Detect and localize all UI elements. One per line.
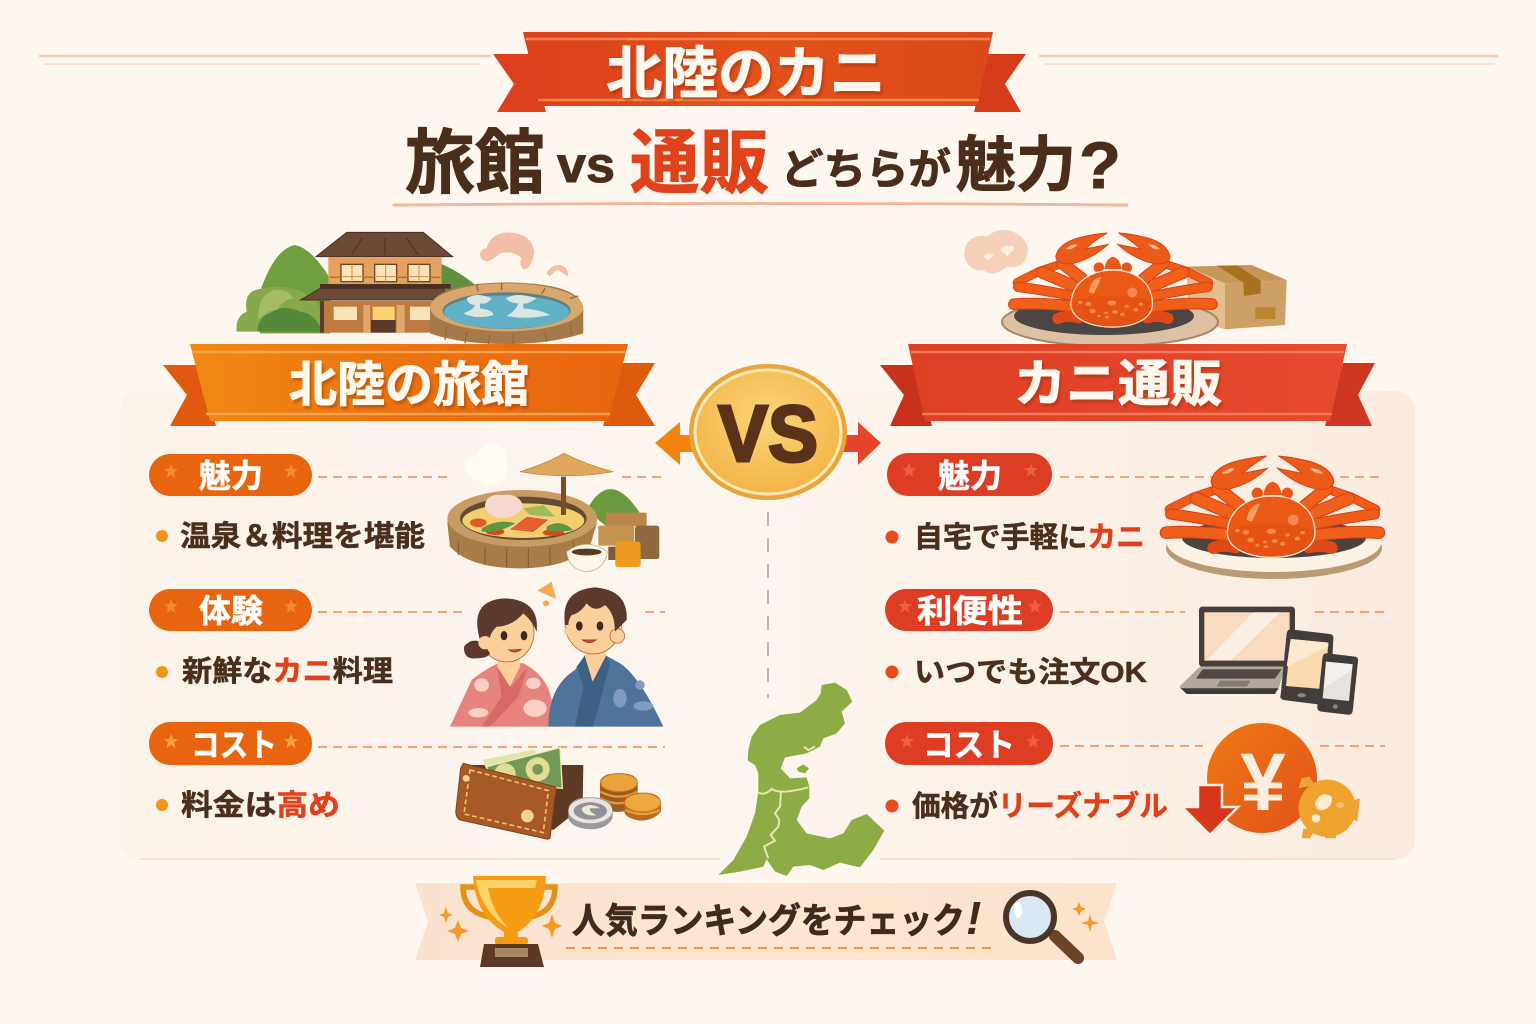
illustration: crab on plate <box>1166 456 1382 579</box>
pill: 体験 <box>149 589 312 631</box>
icon: crab <box>1014 233 1212 327</box>
coin <box>689 364 847 500</box>
icon: plate <box>1002 298 1218 346</box>
plate <box>1166 517 1382 579</box>
pill: 魅力: 魅力 <box>938 458 1002 494</box>
icon: cardboard box <box>1187 265 1287 329</box>
man <box>548 655 663 727</box>
right ribbon <box>880 344 1375 426</box>
pill: 魅力 <box>887 453 1052 496</box>
subtitle: 通販 <box>630 124 769 202</box>
pill: 体験: 体験 <box>199 593 263 629</box>
bullet: いつでも注文OK: いつでも注文OK <box>914 656 1147 689</box>
arrow left <box>655 422 712 465</box>
icon: trophy <box>463 876 555 967</box>
yen coin <box>1207 723 1317 833</box>
illustration: hot pot meal <box>447 443 659 572</box>
right column: コスト <box>885 722 1168 823</box>
subtitle: どちらが <box>781 146 951 193</box>
title ribbon <box>493 32 1026 112</box>
pill: コスト <box>885 722 1053 765</box>
woman <box>450 663 559 727</box>
arrow right <box>825 422 881 465</box>
bullet: 温泉＆料理を堪能: 温泉＆料理を堪能 <box>180 520 425 553</box>
subtitle: vs <box>557 137 615 193</box>
left column: 体験 <box>149 589 393 688</box>
right column: 魅力 <box>886 453 1145 554</box>
left ribbon <box>163 344 655 426</box>
icon: magnifying glass <box>1006 893 1078 958</box>
left column: 魅力 <box>149 454 425 553</box>
left column: コスト <box>149 722 340 822</box>
illustration: couple in yukata <box>450 582 663 727</box>
bullet: 価格がリーズナブル: 価格がリーズナブル <box>912 789 1168 823</box>
illustration: yen coin, arrow and piggy <box>1182 723 1360 838</box>
subtitle: 魅力 <box>956 132 1076 199</box>
illustration: crab with box <box>964 230 1287 346</box>
left ribbon text: 北陸の旅館 <box>289 359 529 412</box>
icon: thought cloud <box>964 230 1028 273</box>
illustration: wallet and coins <box>456 748 661 839</box>
center dashed divider <box>767 512 769 698</box>
down arrow <box>1182 785 1238 835</box>
illustration: laptop and phones <box>1180 607 1358 715</box>
subtitle: 旅館 <box>405 124 545 202</box>
pill: 魅力: 魅力 <box>199 458 263 494</box>
banner exclamation: ! <box>966 892 981 944</box>
bottom banner <box>415 883 1117 960</box>
piggy coin <box>1298 777 1360 838</box>
right ribbon text: カニ通販 <box>1014 356 1222 412</box>
subtitle <box>405 124 1121 202</box>
bullet: 新鮮なカニ料理: 新鮮なカニ料理 <box>182 655 393 688</box>
subtitle underline <box>394 204 1127 205</box>
decorative top rules <box>40 56 1497 64</box>
right column: 利便性 <box>885 589 1147 689</box>
pill: 利便性: 利便性 <box>917 593 1023 629</box>
VS text: VS <box>718 389 818 478</box>
bullet: 自宅で手軽にカニ: 自宅で手軽にカニ <box>914 521 1145 554</box>
yen sign: ¥ <box>1240 737 1286 828</box>
map: Hokuriku region <box>718 683 884 876</box>
dashed row rules <box>318 477 1385 747</box>
crab <box>1166 456 1379 557</box>
illustration: ryokan with onsen <box>236 232 583 344</box>
panel: comparison background <box>120 391 1415 860</box>
spark <box>537 582 556 599</box>
banner text: 人気ランキングをチェック <box>572 902 965 941</box>
pill: 利便性 <box>885 589 1053 631</box>
pill: 魅力 <box>149 454 312 496</box>
title text: 北陸のカニ <box>606 42 886 105</box>
bullet: 料金は高め: 料金は 高め <box>181 789 340 822</box>
VS badge with arrows <box>655 364 881 500</box>
subtitle: ? <box>1079 128 1121 202</box>
pill: コスト: コスト <box>923 727 1015 763</box>
icons: sparkles <box>439 902 1099 942</box>
pill: コスト <box>149 722 312 765</box>
pill: コスト: コスト <box>191 727 277 763</box>
